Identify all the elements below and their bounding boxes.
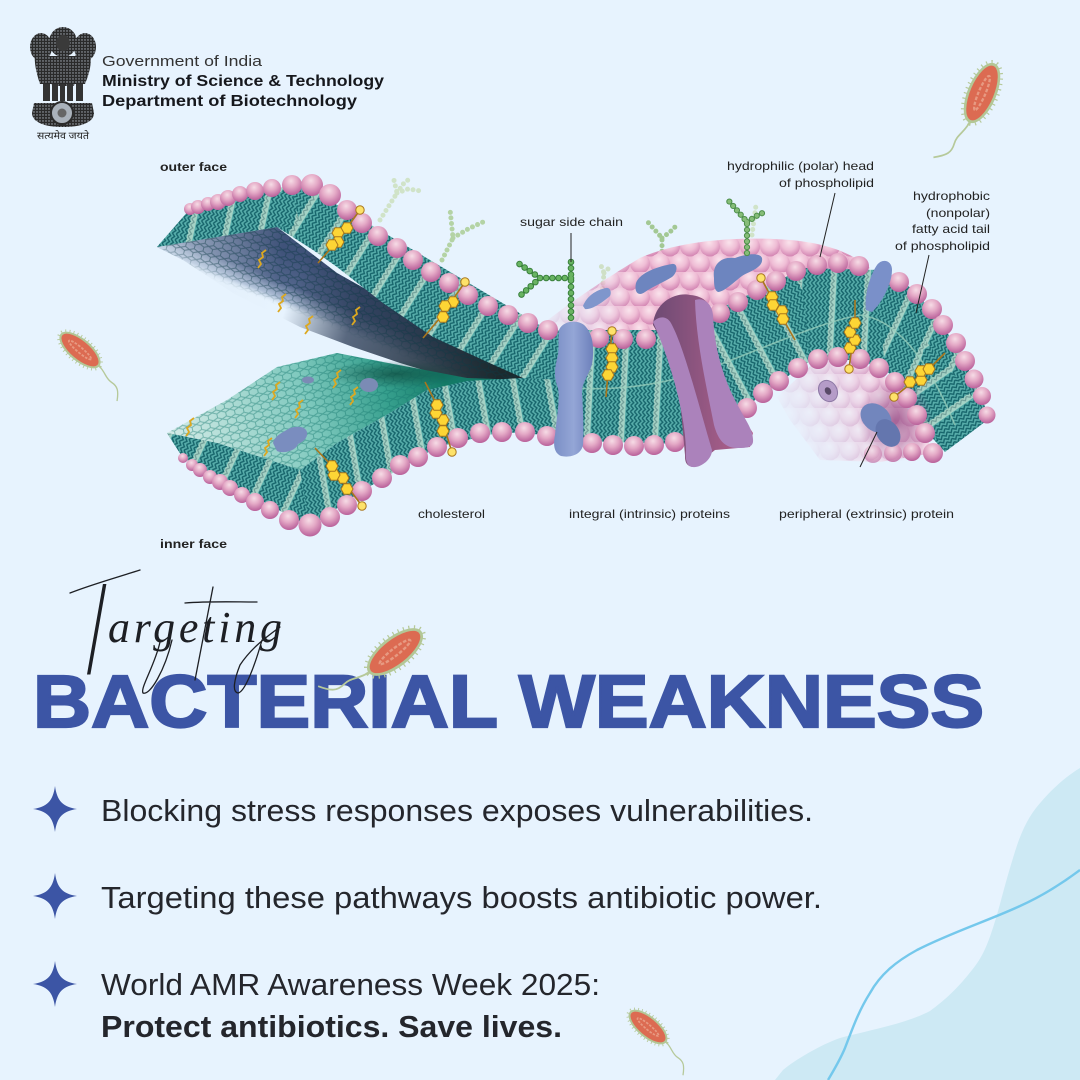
arch inner heads bbox=[737, 347, 943, 463]
emblem motto: सत्यमेव जयते bbox=[37, 130, 89, 142]
logo: national emblem bbox=[30, 27, 96, 142]
peripheral blue protein bbox=[855, 397, 906, 452]
diagram labels: of phospholipid bbox=[779, 176, 874, 190]
cholesterol molecules bbox=[315, 206, 945, 510]
bullet 3: Protect antibiotics. Save lives. bbox=[101, 1009, 562, 1044]
back surface dome of phospholipid heads bbox=[548, 238, 870, 330]
script flourish strokes bbox=[70, 570, 280, 693]
bullet 2 bbox=[33, 873, 822, 919]
icon: star bbox=[33, 786, 77, 832]
diagram labels: hydrophilic (polar) head bbox=[727, 159, 874, 173]
logo text: Ministry of Science & Technology bbox=[102, 73, 384, 90]
bullet 2: Targeting these pathways boosts antibiotic power. bbox=[101, 880, 822, 915]
bacterium bottom bbox=[620, 1003, 699, 1075]
bacterium on title bbox=[318, 615, 432, 715]
phospholipid heads: back edges bbox=[178, 174, 323, 536]
diagram labels: cholesterol bbox=[418, 507, 485, 521]
underside of upper flap bbox=[157, 227, 523, 383]
decorative curve line bbox=[828, 870, 1080, 1080]
small fatty tail squiggles bbox=[186, 250, 360, 456]
phospholipid heads: front edges bbox=[319, 184, 996, 527]
lower flap lipid band bbox=[167, 378, 562, 527]
blue protein in arch bbox=[866, 261, 892, 312]
sugar chain on blue patch bbox=[728, 200, 767, 253]
diagram labels: hydrophobic bbox=[913, 189, 990, 203]
diagram labels: integral (intrinsic) proteins bbox=[569, 507, 730, 521]
logo text: Government of India bbox=[102, 53, 263, 70]
diagram labels: (nonpolar) bbox=[926, 206, 990, 220]
title: BACTERIAL WEAKNESS: BACTERIAL WEAKNESS bbox=[33, 660, 984, 743]
blue surface proteins on dome bbox=[583, 254, 762, 309]
script heading: Targeting: argeting bbox=[108, 603, 282, 652]
blue and small protein blobs on lower flap bbox=[273, 376, 378, 452]
cell membrane diagram bbox=[157, 159, 996, 551]
icon: star bbox=[33, 873, 77, 919]
right arch lipid bilayer bbox=[545, 268, 990, 452]
integral blue protein with sugar chain bbox=[518, 262, 593, 457]
sugar chains faint, behind membrane bbox=[380, 176, 756, 294]
diagram labels: peripheral (extrinsic) protein bbox=[779, 507, 954, 521]
logo text: Department of Biotechnology bbox=[102, 93, 357, 110]
diagram labels: outer face bbox=[160, 160, 227, 174]
bullet 3 bbox=[33, 961, 600, 1044]
upper surface of lower flap bbox=[167, 353, 523, 470]
leader lines bbox=[571, 193, 929, 467]
logo text bbox=[102, 53, 384, 110]
bullet 1: Blocking stress responses exposes vulnerabilities. bbox=[101, 793, 813, 828]
membrane pore bbox=[815, 377, 841, 405]
upper flap lipid band bbox=[157, 185, 562, 387]
bacterium left bbox=[51, 325, 134, 401]
bullet 3: World AMR Awareness Week 2025: bbox=[101, 967, 600, 1002]
bacterium top right bbox=[933, 55, 1009, 171]
script heading: Targeting: T bbox=[51, 542, 147, 714]
decorative blob bottom right bbox=[775, 768, 1080, 1080]
inner dome with heads bbox=[777, 359, 933, 462]
integral purple channel protein bbox=[653, 294, 753, 467]
diagram labels: of phospholipid bbox=[895, 239, 990, 253]
diagram labels: fatty acid tail bbox=[912, 222, 990, 236]
bullet 1 bbox=[33, 786, 813, 832]
diagram labels: inner face bbox=[160, 537, 227, 551]
diagram labels: sugar side chain bbox=[520, 215, 623, 229]
diagram labels bbox=[160, 159, 990, 551]
icon: star bbox=[33, 961, 77, 1007]
